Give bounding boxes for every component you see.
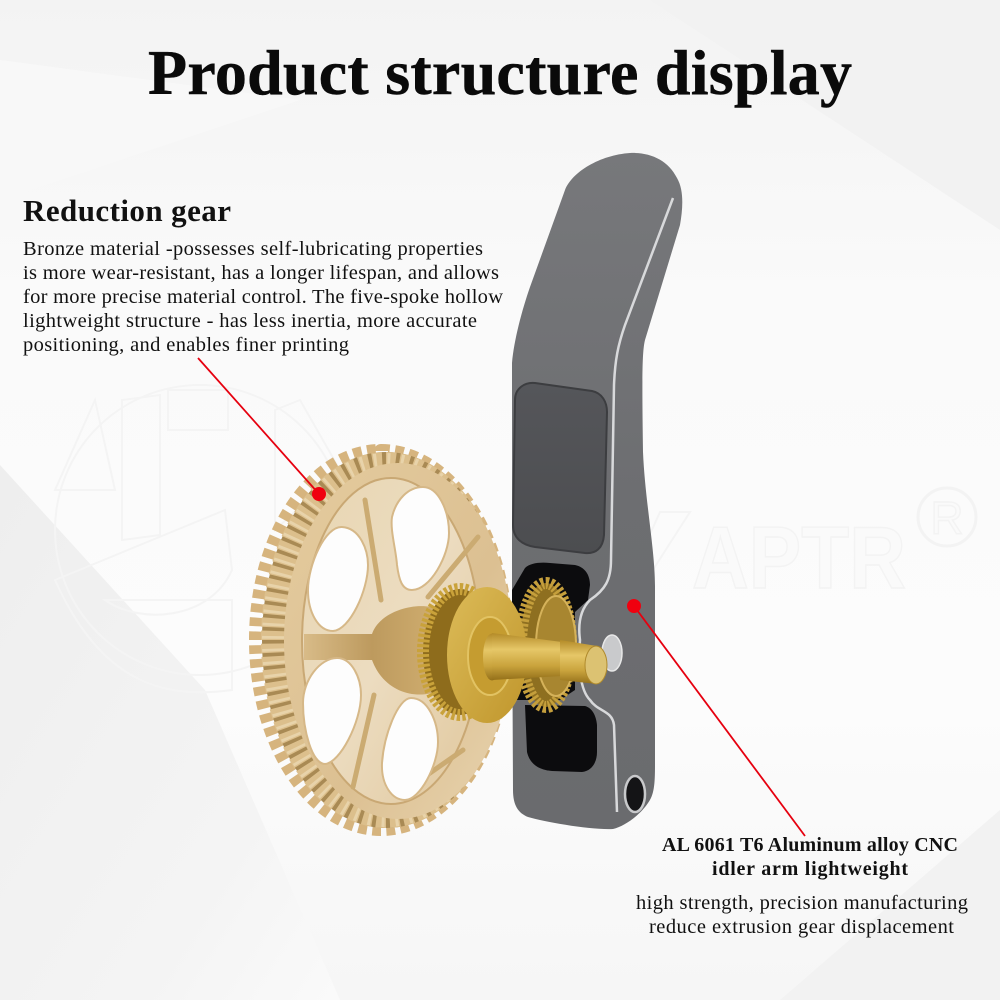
spoke channels: [353, 500, 478, 787]
text block: reduction gear description: for more precise material control. The five-spoke hollow: [23, 286, 503, 308]
gear tooth ridges: [274, 465, 498, 815]
text block: reduction gear description: lightweight structure - has less inertia, more accurate: [23, 310, 477, 332]
text block: reduction gear description: positioning, and enables finer printing: [23, 334, 349, 356]
text block: reduction gear description: Bronze material -possesses self-lubricating properties: [23, 238, 483, 260]
text block: aluminum arm description: [636, 892, 968, 938]
heading: aluminum arm: idler arm lightweight: [712, 858, 908, 880]
arm body: [512, 153, 682, 829]
gear teeth tips: [256, 451, 506, 829]
heading: aluminum arm: [662, 834, 958, 880]
hole: upper left: [308, 527, 368, 631]
lower black opening: [525, 705, 597, 772]
heading: reduction gear: Reduction gear: [23, 193, 231, 228]
watermark: APTR brand: R: [930, 492, 964, 544]
hole: top right: [392, 487, 449, 590]
text block: reduction gear description: [23, 238, 503, 356]
large knurled wheel: [423, 587, 527, 723]
heading: aluminum arm: AL 6061 T6 Aluminum alloy CNC: [662, 834, 958, 856]
bronze reduction gear: [256, 451, 512, 829]
gear rim: [284, 463, 512, 819]
arm highlight edge: [579, 198, 673, 812]
hub and horizontal spoke: [304, 606, 440, 695]
callout line: arm: [627, 599, 805, 836]
hole: lower left: [303, 658, 361, 764]
washer ring: [468, 617, 512, 695]
washer: [447, 587, 527, 723]
pivot pin: [602, 635, 622, 671]
text block: aluminum arm description: high strength, precision manufacturing: [636, 892, 968, 914]
text block: aluminum arm description: reduce extrusion gear displacement: [649, 916, 954, 938]
watermark: APTR brand: APTR: [692, 508, 906, 607]
idler arm: [512, 153, 682, 829]
middle black opening: [512, 563, 590, 700]
title: Product structure display: [148, 37, 852, 108]
small knurled gear: [520, 583, 576, 707]
callout line: gear: [198, 358, 326, 501]
mounting hole: [625, 776, 645, 812]
upper window recess: [513, 383, 607, 553]
gear tooth highlights: [274, 465, 498, 815]
text block: reduction gear description: is more wear-resistant, has a longer lifespan, and allows: [23, 262, 499, 284]
watermark: APTR brand: [625, 488, 976, 607]
hole: lower right: [382, 698, 438, 800]
gear inner face: [302, 478, 480, 804]
brass shaft: [483, 633, 607, 684]
shaft tip: [585, 646, 607, 684]
gear tooth roots: [262, 452, 510, 828]
watermark: logo mark: [55, 385, 345, 692]
